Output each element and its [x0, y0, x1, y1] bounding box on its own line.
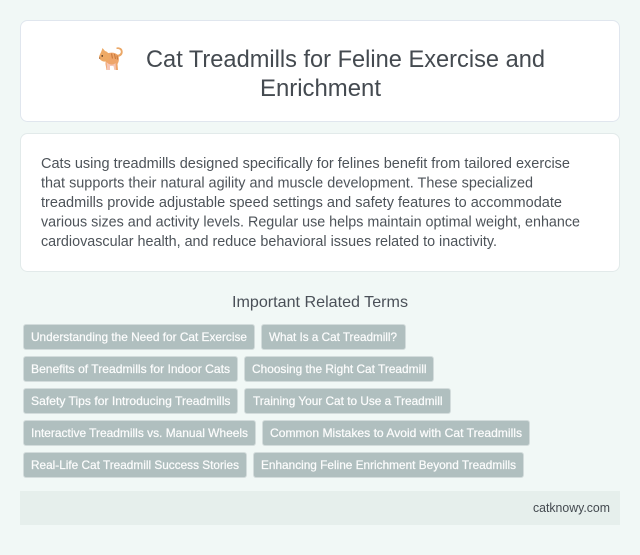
- tag: Common Mistakes to Avoid with Cat Treadmills: [270, 426, 522, 440]
- heading: related terms: Important Related Terms: [232, 294, 408, 311]
- text block: description: [41, 156, 580, 250]
- title: [146, 46, 545, 102]
- tag: [24, 356, 238, 382]
- tags: related terms: [24, 324, 530, 478]
- tag: Interactive Treadmills vs. Manual Wheels: [31, 426, 248, 440]
- tag: [262, 420, 530, 446]
- tag: [24, 388, 238, 414]
- tag: Safety Tips for Introducing Treadmills: [31, 394, 230, 408]
- footer: [20, 491, 620, 525]
- tag: Benefits of Treadmills for Indoor Cats: [31, 362, 230, 376]
- text block: description: Cats using treadmills designed specifically for felines benefit from tailored exercise: [41, 156, 570, 172]
- text block: description: various sizes and activity levels. Regular use helps maintain optimal weight, enhance: [41, 214, 580, 230]
- text block: description: that supports their natural agility and muscle development. These specialized: [41, 176, 533, 192]
- icon: cat: [99, 47, 123, 70]
- panel: title card: [20, 20, 620, 122]
- footer: catknowy.com: [533, 500, 610, 515]
- title: Cat Treadmills for Feline Exercise and: [146, 46, 545, 73]
- title: Enrichment: [260, 75, 381, 102]
- tag: [244, 356, 434, 382]
- tag: [24, 420, 256, 446]
- text block: description: cardiovascular health, and reduce behavioral issues related to inactivity.: [41, 234, 497, 250]
- tag: [24, 324, 254, 350]
- tag: Understanding the Need for Cat Exercise: [31, 330, 247, 344]
- tag: [262, 324, 406, 350]
- tag: Choosing the Right Cat Treadmill: [252, 362, 426, 376]
- tag: Enhancing Feline Enrichment Beyond Treadmills: [261, 458, 516, 472]
- panel: description: [20, 134, 620, 272]
- tag: Real-Life Cat Treadmill Success Stories: [31, 458, 239, 472]
- tag: Training Your Cat to Use a Treadmill: [253, 394, 442, 408]
- tag: [24, 452, 246, 478]
- text block: description: treadmills provide adjustable speed settings and safety features to accommodate: [41, 195, 562, 211]
- tag: What Is a Cat Treadmill?: [269, 330, 397, 344]
- tag: [244, 388, 450, 414]
- tag: [254, 452, 524, 478]
